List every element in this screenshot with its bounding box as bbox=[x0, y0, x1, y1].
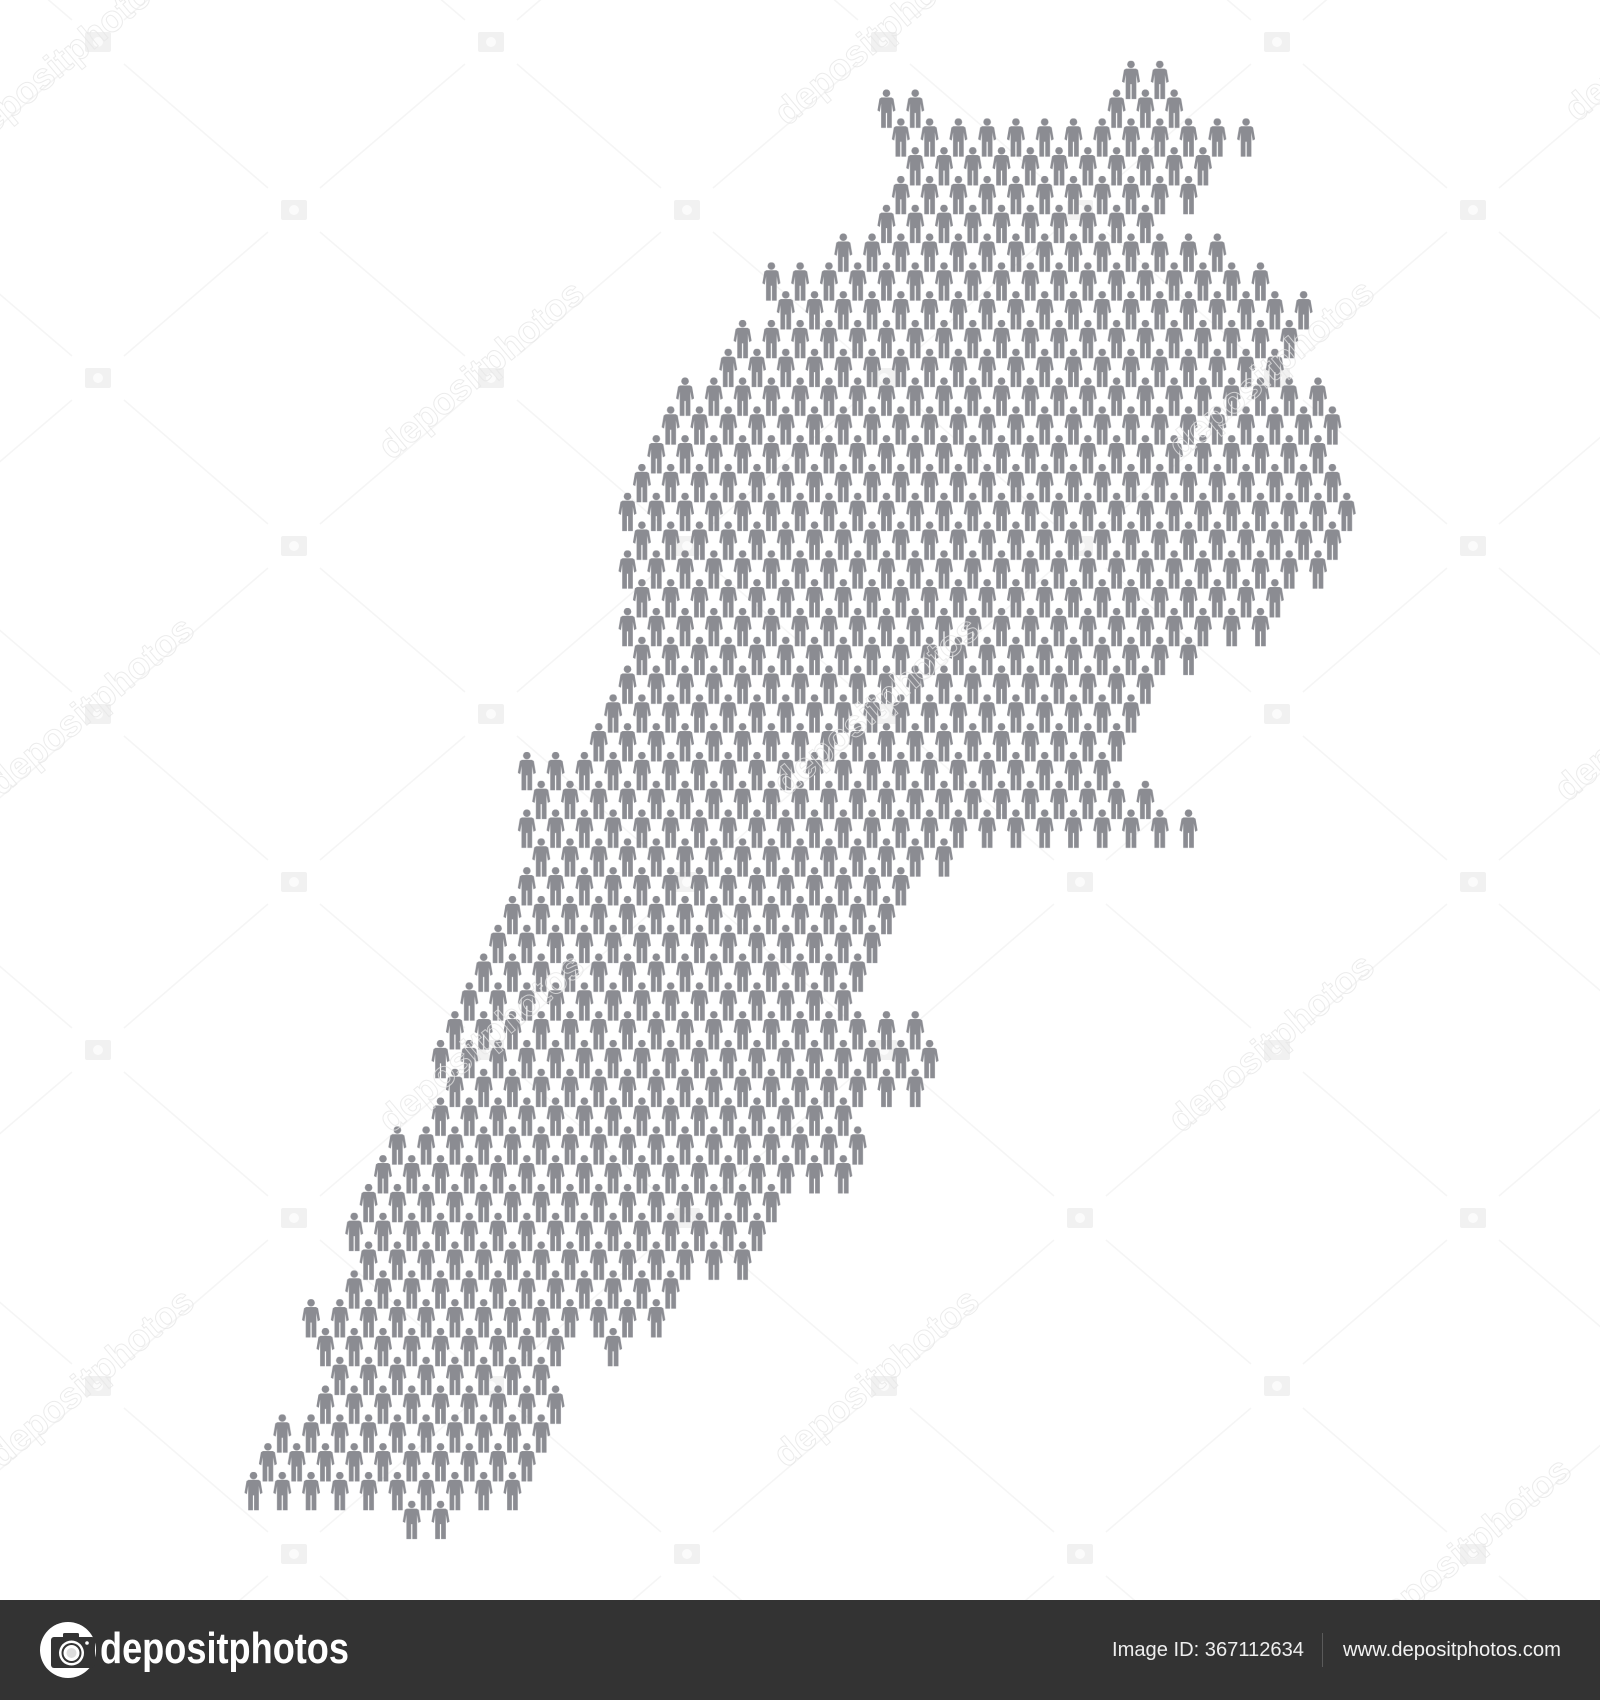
footer divider bbox=[1322, 1633, 1323, 1667]
diagonal watermark text: depositphotos bbox=[1357, 1449, 1579, 1644]
diagonal watermark text: depositphotos bbox=[370, 945, 592, 1140]
logo wordmark: depositphotos bbox=[100, 1624, 349, 1673]
diagonal watermark text: depositphotos bbox=[1160, 945, 1382, 1140]
map of Lebanon made of people pictograms bbox=[242, 61, 1358, 1541]
people: odd rows bbox=[242, 90, 1358, 1512]
diagonal watermark text: depositphotos bbox=[765, 1280, 987, 1475]
diagonal watermark text: depositphotos bbox=[370, 272, 592, 467]
diagonal watermark text: depositphotos bbox=[1160, 271, 1382, 466]
image id: Image ID: 367112634 bbox=[1112, 1639, 1304, 1661]
icon: depositphotos camera logo bbox=[40, 1622, 96, 1678]
diagonal watermark text: depositphotos bbox=[765, 608, 987, 803]
website url: www.depositphotos.com bbox=[1342, 1639, 1561, 1661]
people: even rows bbox=[256, 61, 1344, 1541]
footer bar bbox=[0, 1600, 1600, 1700]
